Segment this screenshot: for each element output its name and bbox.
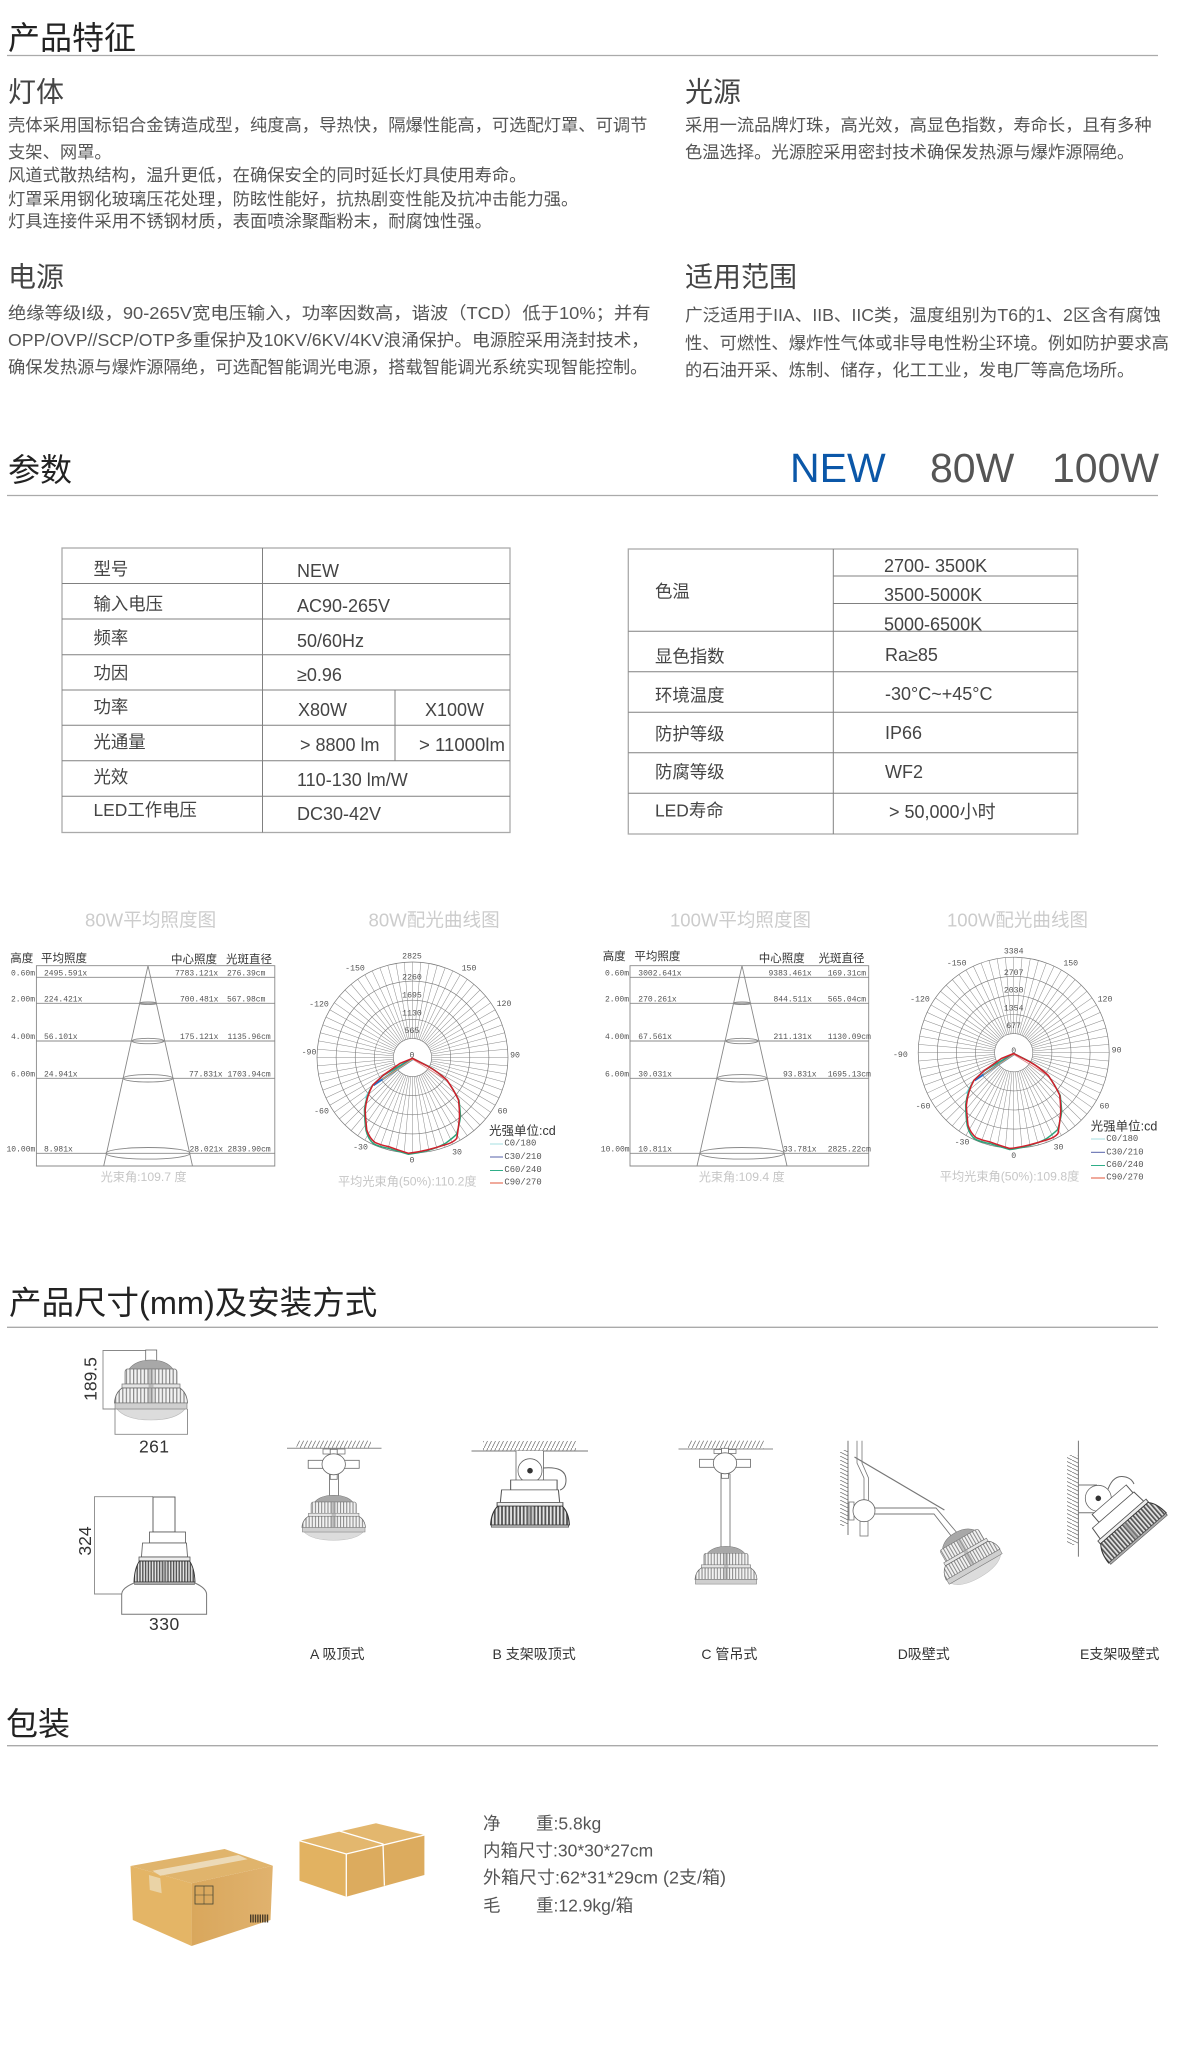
dimension drawing: lamp 330 × 324: 324 [75, 1526, 95, 1556]
chart: 80W light distribution curve: -30 [353, 1144, 368, 1152]
section: parameters [6, 445, 1159, 1189]
chart: 80W average illuminance: 6.00m [11, 1070, 35, 1080]
icon: carton box with white straps [300, 1823, 424, 1897]
chart: 80W average illuminance: 56.101x [44, 1033, 78, 1042]
block: lamp body: 壳体采用国标铝合金铸造成型，纯度高，导热快，隔爆性能高，可选配灯罩、可调节 [8, 115, 647, 135]
chart: 100W average illuminance: 0.60m [605, 970, 629, 978]
block: lamp body: 风道式散热结构，温升更低，在确保安全的同时延长灯具使用寿命。 [8, 165, 526, 185]
table: left specs: 110-130 lm/W [297, 770, 408, 790]
chart: 100W light distribution curve: 2030 [1004, 986, 1024, 996]
packaging details: 重:12.9kg/箱 [536, 1896, 633, 1916]
table: right specs: -30°C~+45°C [885, 684, 992, 704]
chart: 100W average illuminance: 2825.22cm [828, 1146, 871, 1154]
table: left specs: 50/60Hz [297, 631, 364, 651]
chart: 80W light distribution curve: C30/210 [504, 1152, 542, 1162]
mount E: bracket wall: E支架吸壁式 [1080, 1646, 1159, 1662]
packaging details: 毛 [483, 1896, 500, 1916]
block: application scope [685, 262, 1169, 380]
chart: 80W average illuminance: 567.98cm [227, 996, 266, 1004]
table: right specs: Ra≥85 [885, 645, 938, 665]
icon: carton box with tape [130, 1849, 273, 1946]
chart: 80W light distribution curve [290, 910, 556, 1189]
chart: 100W light distribution curve: C30/210 [1106, 1147, 1144, 1157]
chart: 80W light distribution curve: -150 [345, 964, 365, 974]
chart: 100W average illuminance: 3002.641x [638, 970, 682, 978]
chart: 80W light distribution curve: 2825 [402, 952, 422, 962]
packaging details: 净 [483, 1813, 500, 1833]
table: left specs: > 8800 lm [300, 735, 380, 755]
chart: 80W average illuminance: 1703.94cm [228, 1070, 271, 1080]
mount C: pipe pendant [678, 1441, 773, 1662]
mount A: ceiling: A 吸顶式 [310, 1646, 364, 1662]
chart: 100W average illuminance: 10.00m [601, 1146, 630, 1154]
chart: 80W light distribution curve: 80W配光曲线图 [368, 910, 500, 930]
table: right specs: > 50,000小时 [889, 802, 996, 822]
chart: 80W average illuminance: 77.831x [189, 1070, 223, 1080]
chart: 100W light distribution curve: 1354 [1004, 1004, 1024, 1014]
heading: dimensions and installation: 产品尺寸(mm)及安装方式 [9, 1285, 377, 1321]
table: right specs: 色温 [655, 582, 690, 602]
chart: 100W average illuminance: 100W平均照度图 [670, 910, 811, 930]
mount C: pipe pendant: C 管吊式 [701, 1646, 757, 1662]
chart: 80W light distribution curve: 光强单位:cd [489, 1123, 556, 1138]
table: right specs: 显色指数 [655, 647, 725, 667]
block: application scope: 广泛适用于IIA、IIB、IIC类，温度组别为T6的1、2区含有腐蚀 [685, 305, 1161, 325]
table: left specs: 功率 [94, 697, 128, 717]
dimension drawing: lamp 261 × 189.5: 261 [139, 1437, 169, 1457]
chart: 100W light distribution curve [891, 910, 1157, 1184]
chart: 80W light distribution curve: 1130 [402, 1010, 422, 1018]
chart: 80W average illuminance: 4.00m [11, 1033, 35, 1042]
dimension drawing: lamp 330 × 324 [75, 1497, 207, 1634]
chart: 80W light distribution curve: 0 [410, 1052, 415, 1060]
mount B: bracket ceiling [472, 1441, 588, 1662]
chart: 80W average illuminance: 0.60m [11, 970, 35, 978]
chart: 80W average illuminance [6, 910, 275, 1184]
table: right specs [628, 549, 1078, 834]
block: lamp body: 灯罩采用钢化玻璃压花处理，防眩性能好，抗热剧变性能及抗冲击能力强。 [8, 189, 578, 209]
chart: 80W light distribution curve: 1695 [402, 992, 422, 1000]
chart: 80W light distribution curve: -90 [302, 1048, 316, 1058]
table: right specs: 环境温度 [655, 686, 725, 706]
packaging details: 重:5.8kg [536, 1813, 601, 1833]
chart: 80W average illuminance: 光斑直径 [226, 952, 272, 966]
table: left specs [62, 548, 510, 832]
mount D: wall arm [840, 1441, 1007, 1662]
chart: 80W light distribution curve: 60 [498, 1108, 507, 1116]
table: left specs: 频率 [94, 628, 128, 648]
chart: 100W average illuminance: 平均照度 [634, 949, 681, 963]
chart: 100W average illuminance: 169.31cm [828, 970, 866, 978]
table: left specs: 光通量 [94, 732, 146, 752]
chart: 100W light distribution curve: C60/240 [1106, 1160, 1144, 1170]
chart: 80W average illuminance: 高度 [10, 951, 34, 965]
chart: 100W average illuminance: 67.561x [638, 1033, 672, 1042]
chart: 100W average illuminance: 1130.09cm [828, 1033, 871, 1042]
heading: product features: 产品特征 [8, 20, 136, 56]
chart: 80W average illuminance: 2839.90cm [228, 1146, 271, 1154]
table: left specs: 光效 [94, 767, 128, 787]
chart: 100W average illuminance: 光束角:109.4 度 [699, 1169, 785, 1184]
chart: 100W average illuminance: 6.00m [605, 1070, 629, 1080]
chart: 80W light distribution curve: 0 [410, 1156, 415, 1166]
chart: 100W average illuminance: 2.00m [605, 996, 629, 1004]
chart: 100W average illuminance: 270.261x [638, 996, 677, 1004]
section: packaging [6, 1706, 1158, 1946]
block: lamp body: 灯体 [8, 76, 64, 108]
chart: 80W average illuminance: 175.121x [180, 1033, 219, 1042]
chart: 80W average illuminance: 2495.591x [44, 970, 87, 978]
chart: 100W light distribution curve: 150 [1063, 960, 1078, 968]
table: left specs: NEW [297, 561, 339, 581]
table: right specs: 防护等级 [655, 724, 725, 744]
mount A: ceiling [287, 1441, 382, 1662]
block: application scope: 的石油开采、炼制、储存，化工工业，发电厂等高危场所。 [685, 360, 1134, 380]
chart: 100W light distribution curve: 0 [1011, 1047, 1016, 1056]
table: right specs: 3500-5000K [884, 585, 982, 605]
chart: 100W light distribution curve: 677 [1006, 1022, 1021, 1031]
chart: 100W light distribution curve: C0/180 [1106, 1134, 1138, 1144]
block: power supply: 确保发热源与爆炸源隔绝，可选配智能调光电源，搭载智能调光系统实现智能控制。 [8, 357, 647, 377]
chart: 80W light distribution curve: C60/240 [504, 1165, 542, 1175]
block: power supply: 电源 [8, 262, 64, 292]
block: lamp body [8, 76, 647, 231]
chart: 80W light distribution curve: 平均光束角(50%):110.2度 [338, 1174, 477, 1189]
block: power supply: 绝缘等级I级，90-265V宽电压输入，功率因数高，谐波（TCD）低于10%；并有 [8, 303, 650, 323]
packaging details [483, 1813, 726, 1916]
chart: 80W average illuminance: 8.981x [44, 1146, 73, 1154]
chart: 100W average illuminance: 844.511x [774, 996, 812, 1004]
block: application scope: 适用范围 [685, 262, 797, 292]
model tabs [790, 445, 1159, 491]
chart: 100W light distribution curve: 60 [1099, 1102, 1109, 1112]
chart: 100W average illuminance: 33.781x [783, 1146, 817, 1154]
table: right specs: 5000-6500K [884, 614, 982, 634]
chart: 80W light distribution curve: 2260 [402, 974, 422, 982]
model tabs: 80W [930, 445, 1015, 491]
chart: 80W light distribution curve: C0/180 [504, 1139, 536, 1149]
chart: 100W average illuminance: 中心照度 [759, 951, 805, 965]
table: left specs: 功因 [94, 663, 128, 683]
chart: 100W average illuminance: 光斑直径 [818, 951, 864, 965]
block: light source [685, 76, 1152, 162]
chart: 100W light distribution curve: 光强单位:cd [1091, 1119, 1157, 1134]
chart: 80W light distribution curve: -60 [314, 1108, 329, 1116]
chart: 80W light distribution curve: 150 [462, 964, 476, 974]
chart: 100W light distribution curve: 120 [1098, 996, 1112, 1004]
chart: 100W light distribution curve: 2707 [1004, 969, 1024, 978]
chart: 100W light distribution curve: -90 [893, 1051, 908, 1060]
section: product features [7, 20, 1169, 380]
chart: 100W light distribution curve: 100W配光曲线图 [947, 910, 1088, 930]
heading: parameters: 参数 [8, 452, 72, 488]
table: left specs: 输入电压 [94, 594, 163, 614]
dimension drawing: lamp 261 × 189.5 [81, 1350, 188, 1457]
chart: 80W average illuminance: 光束角:109.7 度 [101, 1169, 187, 1184]
packaging details: 外箱尺寸:62*31*29cm (2支/箱) [483, 1868, 726, 1888]
chart: 80W average illuminance: 7783.121x [175, 970, 218, 978]
block: light source: 色温选择。光源腔采用密封技术确保发热源与爆炸源隔绝。 [685, 142, 1134, 162]
table: right specs: 2700- 3500K [884, 556, 987, 576]
chart: 80W average illuminance: 1135.96cm [228, 1033, 271, 1042]
chart: 100W light distribution curve: C90/270 [1106, 1173, 1144, 1183]
chart: 100W average illuminance: 4.00m [605, 1033, 629, 1042]
chart: 100W average illuminance: 1695.13cm [828, 1070, 871, 1080]
chart: 80W light distribution curve: -120 [309, 1000, 329, 1010]
model tabs: 100W [1052, 445, 1159, 491]
block: power supply: OPP/OVP//SCP/OTP多重保护及10KV/6KV/4KV浪涌保护。电源腔采用浇封技术， [8, 330, 649, 350]
section: dimensions and installation [7, 1285, 1168, 1662]
chart: 80W average illuminance: 2.00m [11, 996, 35, 1004]
chart: 100W average illuminance [601, 910, 871, 1184]
chart: 100W light distribution curve: -120 [910, 996, 930, 1004]
mount B: bracket ceiling: B 支架吸顶式 [492, 1646, 576, 1662]
chart: 80W average illuminance: 24.941x [44, 1070, 78, 1080]
chart: 100W light distribution curve: 90 [1112, 1046, 1122, 1056]
chart: 80W light distribution curve: 90 [510, 1052, 520, 1060]
chart: 100W average illuminance: 30.031x [638, 1070, 672, 1080]
heading: packaging: 包装 [6, 1706, 70, 1742]
chart: 100W average illuminance: 93.831x [783, 1070, 817, 1080]
chart: 80W average illuminance: 平均照度 [41, 951, 87, 965]
chart: 80W average illuminance: 10.00m [6, 1146, 36, 1154]
chart: 100W light distribution curve: -150 [947, 960, 967, 968]
dimension drawing: lamp 261 × 189.5: 189.5 [81, 1357, 101, 1401]
chart: 80W average illuminance: 276.39cm [227, 970, 266, 978]
table: left specs: AC90-265V [297, 596, 390, 616]
chart: 80W average illuminance: 224.421x [44, 996, 83, 1004]
table: left specs: LED工作电压 [94, 800, 197, 820]
table: left specs: ≥0.96 [297, 665, 342, 685]
chart: 100W average illuminance: 211.131x [774, 1033, 812, 1042]
chart: 100W average illuminance: 高度 [603, 949, 626, 963]
chart: 80W average illuminance: 28.021x [190, 1146, 223, 1154]
chart: 80W light distribution curve: 30 [452, 1148, 462, 1158]
block: light source: 采用一流品牌灯珠，高光效，高显色指数，寿命长，且有多种 [685, 115, 1152, 135]
table: left specs: X80W [298, 700, 347, 720]
chart: 80W light distribution curve: C90/270 [504, 1178, 542, 1188]
block: power supply [8, 262, 650, 377]
table: right specs: IP66 [885, 723, 922, 743]
table: left specs: DC30-42V [297, 804, 381, 824]
mount D: wall arm: D吸壁式 [898, 1646, 950, 1662]
table: left specs: > 11000lm [419, 735, 505, 755]
model tabs: NEW [790, 445, 886, 491]
table: left specs: 型号 [94, 559, 128, 579]
chart: 100W light distribution curve: -60 [916, 1102, 930, 1112]
chart: 80W average illuminance: 中心照度 [171, 952, 217, 966]
chart: 100W average illuminance: 9383.461x [768, 970, 812, 978]
table: left specs: X100W [425, 700, 484, 720]
block: lamp body: 灯具连接件采用不锈钢材质，表面喷涂聚酯粉末，耐腐蚀性强。 [8, 211, 492, 231]
chart: 100W average illuminance: 565.04cm [828, 996, 866, 1004]
chart: 100W average illuminance: 10.811x [638, 1146, 672, 1154]
chart: 100W light distribution curve: 平均光束角(50%):109.8度 [940, 1169, 1079, 1184]
chart: 80W light distribution curve: 120 [497, 1000, 511, 1009]
table: right specs: LED寿命 [655, 801, 724, 821]
chart: 80W average illuminance: 700.481x [180, 996, 219, 1004]
chart: 100W light distribution curve: 3384 [1004, 948, 1024, 956]
mount E: bracket wall [1067, 1441, 1168, 1662]
packaging details: 内箱尺寸:30*30*27cm [483, 1841, 653, 1861]
chart: 100W light distribution curve: 0 [1011, 1152, 1016, 1161]
table: right specs: 防腐等级 [655, 762, 725, 782]
block: lamp body: 支架、网罩。 [8, 142, 112, 162]
dimension drawing: lamp 330 × 324: 330 [149, 1614, 180, 1634]
table: right specs: WF2 [885, 762, 923, 782]
chart: 100W light distribution curve: -30 [955, 1138, 969, 1148]
chart: 80W average illuminance: 80W平均照度图 [85, 910, 216, 930]
chart: 100W light distribution curve: 30 [1054, 1144, 1063, 1152]
block: application scope: 性、可燃性、爆炸性气体或非导电性粉尘环境。例如防护要求高 [685, 333, 1169, 353]
chart: 80W light distribution curve: 565 [405, 1027, 419, 1036]
block: light source: 光源 [685, 76, 741, 108]
